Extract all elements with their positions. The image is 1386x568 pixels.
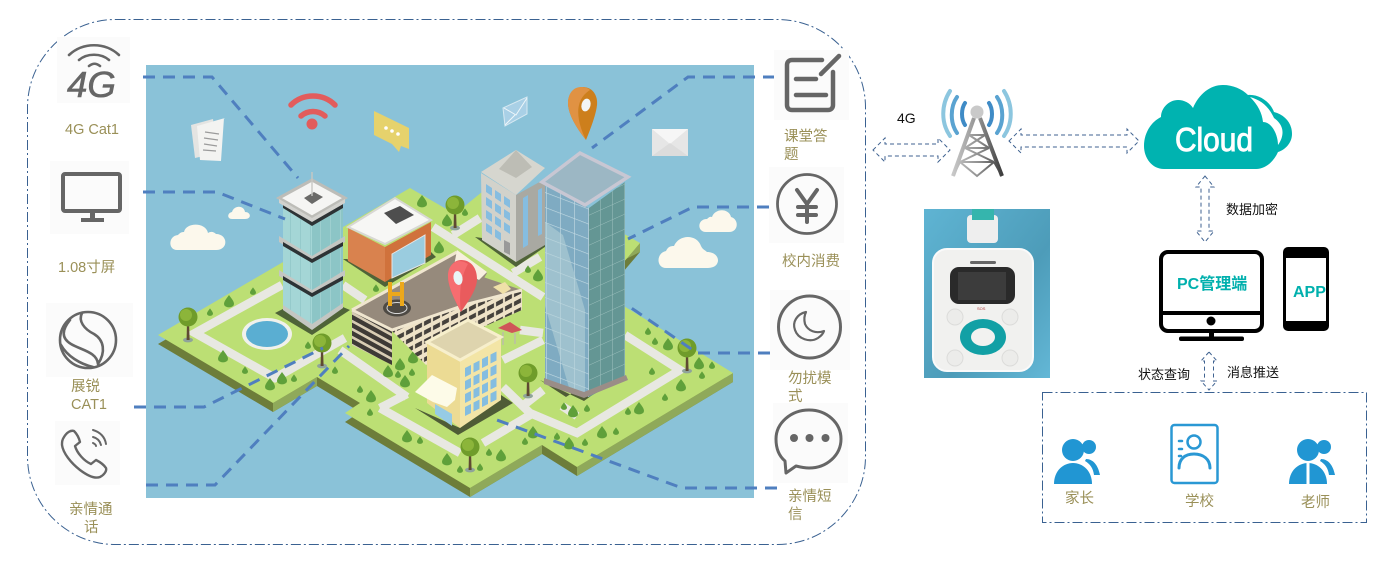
feature: Spreadtrum CAT1: [46, 303, 133, 413]
label: family call line 2: 话: [84, 519, 98, 536]
trees: [178, 196, 696, 472]
label: campus spending: 校内消费: [782, 253, 840, 270]
icon: school: [1172, 425, 1218, 483]
icon: orange map pin: [568, 87, 597, 140]
label: class quiz: 课堂答: [784, 128, 828, 145]
icon: red map pin: [448, 260, 477, 312]
illustration: isometric smart campus: [146, 0, 754, 498]
grey building: [475, 150, 552, 267]
icon: yellow chat bubble: [374, 111, 409, 152]
label: do not disturb line 2: 式: [788, 388, 803, 405]
label: class quiz line 2: 题: [784, 147, 798, 163]
arrow: tower to cloud: [1009, 129, 1139, 153]
photo: student card device: [924, 209, 1050, 378]
arrow: cloud to management: [1196, 176, 1214, 242]
label: parents: 家长: [1065, 490, 1094, 507]
label: 4G Cat1: 4G Cat1: [65, 122, 119, 138]
icon: Spreadtrum logo: [46, 303, 133, 377]
label: family SMS line 2: 信: [788, 506, 802, 523]
arrow: device to tower: [873, 138, 950, 162]
feature: campus spending: [769, 167, 844, 270]
feature: family call: [55, 421, 120, 536]
label: 1.08 inch: 1.08寸屏: [58, 259, 115, 276]
icon: yen: [769, 167, 844, 243]
feature: family SMS: [773, 403, 848, 523]
icon: parents: [1054, 439, 1100, 484]
icon: teachers: [1289, 439, 1335, 484]
label: Cloud: Cloud: [1175, 121, 1253, 158]
teal tower: [275, 0, 373, 335]
icon: blue envelope: [503, 97, 527, 126]
clouds: [170, 207, 737, 268]
icon: white envelope: [652, 129, 688, 156]
tall glass tower: [540, 153, 628, 401]
feature: class quiz: [774, 50, 849, 163]
feature: 1.08 inch screen: [50, 161, 129, 276]
icon: PC monitor: [1161, 252, 1262, 341]
panel: campus card features: [28, 0, 866, 544]
label: PC admin: PC管理端: [1177, 274, 1247, 293]
icon: paper documents: [191, 118, 225, 161]
bushes: [207, 195, 715, 473]
feature: 4G Cat1: [57, 37, 130, 138]
label: message push: 消息推送: [1227, 365, 1279, 380]
dashed outer frame: [28, 20, 866, 544]
photo: student card device: SOS: [977, 306, 986, 311]
icon: smartphone: [1283, 247, 1329, 331]
arrow: management to users: [1201, 352, 1217, 390]
icon: moon: [770, 290, 850, 370]
label: Spreadtrum: 展锐: [71, 378, 100, 395]
label: CAT1: CAT1: [71, 397, 107, 413]
pond: [242, 318, 292, 350]
icon: phone: [55, 421, 120, 485]
helipad: [383, 282, 411, 316]
icon: red wifi: [291, 96, 335, 130]
label: 4G link: 4G: [897, 110, 916, 126]
icon: cloud: [1144, 85, 1292, 169]
icon: monitor: [50, 161, 129, 234]
label: family call: 亲情通: [69, 501, 113, 518]
label: status query: 状态查询: [1138, 367, 1190, 382]
label: teachers: 老师: [1301, 494, 1330, 511]
orange building: [343, 198, 436, 287]
icon: speech bubble: [773, 403, 848, 483]
red canopy: [498, 322, 522, 345]
label: data encryption: 数据加密: [1226, 202, 1278, 217]
panel: users: [1042, 392, 1366, 522]
label: APP: APP: [1293, 284, 1326, 301]
label: school: 学校: [1185, 493, 1214, 510]
connector lines: [134, 77, 777, 488]
icon: notepad: [774, 50, 849, 120]
yellow building: [415, 320, 513, 435]
icon: signal tower: [943, 91, 1011, 176]
icon: 4G signal: 4G: [67, 64, 116, 105]
brown H building: [352, 250, 522, 365]
feature: do not disturb: [770, 290, 850, 405]
label: do not disturb: 勿扰模: [788, 370, 832, 387]
label: family SMS: 亲情短: [788, 488, 832, 505]
isometric ground: [158, 188, 733, 497]
